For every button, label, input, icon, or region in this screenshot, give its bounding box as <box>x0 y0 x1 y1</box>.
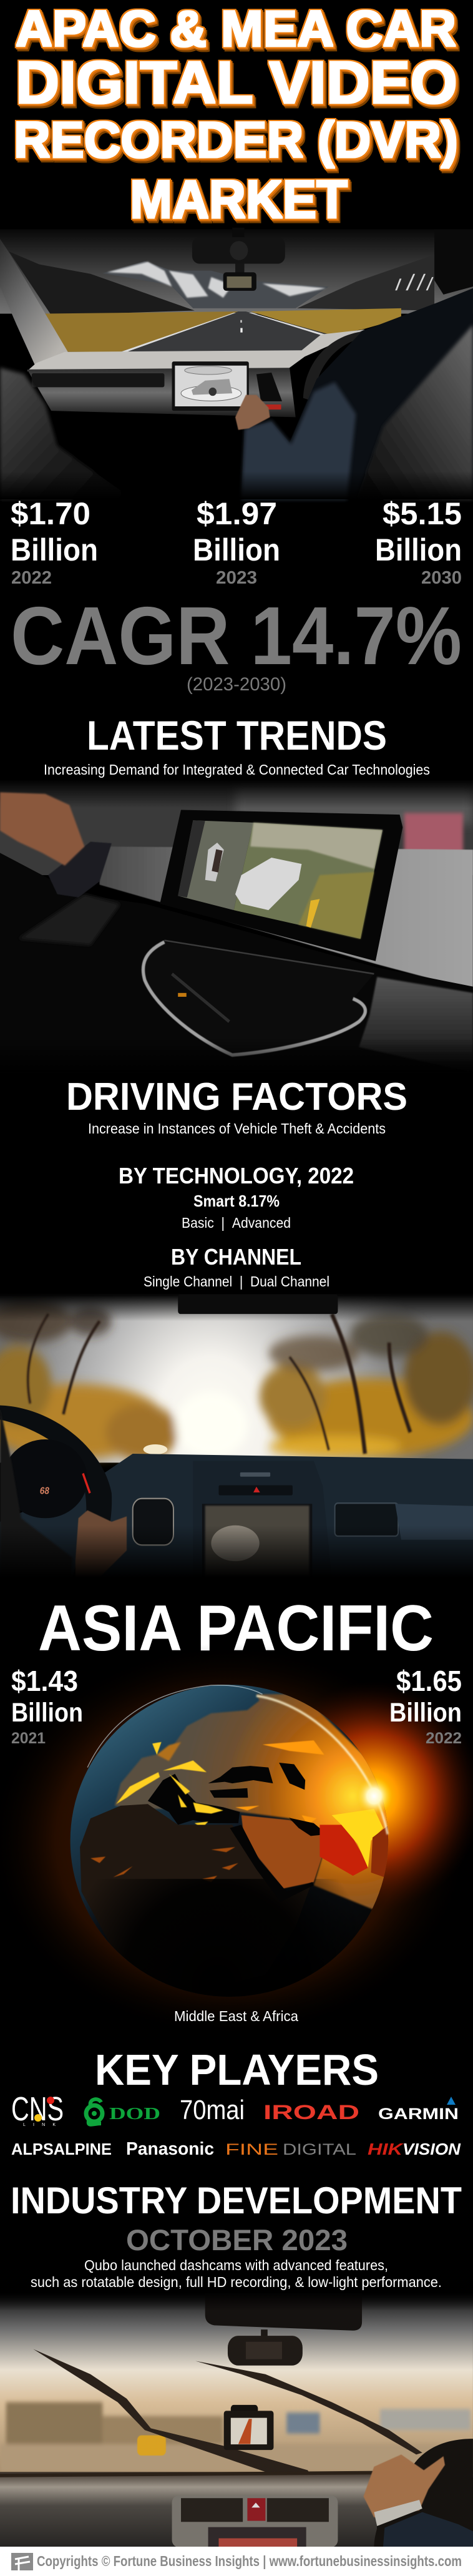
footer band <box>0 2547 473 2576</box>
stat: 2022 market value: $1.70 <box>11 496 90 531</box>
latest trends description: Increasing Demand for Integrated & Connected Car Technologies <box>44 762 430 778</box>
wipers <box>33 2349 422 2479</box>
tablet display <box>172 361 249 411</box>
segment: by channel: BY CHANNEL <box>171 1244 301 1270</box>
logo: Panasonic: Panasonic <box>126 2139 214 2159</box>
stat: 2030 market value: 2030 <box>421 568 462 588</box>
rear view mirror with dashcam <box>192 228 285 291</box>
stat: 2023 market value <box>193 496 280 588</box>
photo: autumn road through windshield <box>0 1295 473 1577</box>
dash trim and climate panel <box>143 941 374 1055</box>
date: october 2023: OCTOBER 2023 <box>126 2223 348 2256</box>
dashboard: 68 <box>40 1486 50 1497</box>
stat: 2022 market value: 2022 <box>11 568 52 588</box>
hazard and air vents <box>172 2495 338 2547</box>
globe illustration <box>20 1647 473 2012</box>
regional stat: 2022: Billion <box>389 1698 462 1728</box>
CAGR period: (2023-2030) <box>187 674 286 695</box>
industry development description <box>31 2257 442 2290</box>
africa <box>80 1804 310 1934</box>
industry development description: such as rotatable design, full HD recording, & low-light performance. <box>31 2274 442 2290</box>
logo: DOD <box>86 2099 160 2125</box>
yellow taxi <box>137 2436 166 2456</box>
photo: driver windshield and dashboard tablet <box>0 228 473 499</box>
logo: Hikvision: VISION <box>402 2140 461 2158</box>
stat: 2022 market value: Billion <box>11 532 98 567</box>
seats and driver <box>0 368 124 499</box>
title: APAC & MEA CAR <box>16 1 456 57</box>
regional stat: 2021: 2021 <box>11 1730 46 1747</box>
photo: rainy windshield with wipers and GPS <box>0 2292 473 2547</box>
heading: latest trends: LATEST TRENDS <box>87 712 387 758</box>
footer logo <box>11 2553 33 2570</box>
logo: Alps Alpine: ALPSALPINE <box>11 2140 112 2158</box>
mirror and dash camera <box>205 2301 362 2366</box>
title: DIGITAL VIDEO <box>16 49 457 116</box>
stat: 2023 market value: 2023 <box>216 568 257 588</box>
regional stat: 2022 <box>389 1665 462 1747</box>
title <box>14 1 458 230</box>
logo: CNS Link: CNS <box>11 2090 64 2128</box>
logo: Garmin <box>378 2097 459 2123</box>
logo: IROAD: IROAD <box>263 2101 359 2123</box>
dashboard <box>0 1405 473 1577</box>
driver hand and steering wheel <box>363 2439 473 2547</box>
segment: by technology: Basic | Advanced <box>182 1215 291 1231</box>
europe and mediterranean <box>116 1740 324 1828</box>
stat: 2023 market value: Billion <box>193 532 280 567</box>
title: MARKET <box>130 170 348 230</box>
logo: DOD: DOD <box>109 2104 160 2123</box>
title: RECORDER (DVR) <box>14 112 458 169</box>
arabia and red sea <box>241 1815 327 1889</box>
industry development description: Qubo launched dashcams with advanced features, <box>84 2257 388 2273</box>
regional stat: 2021 <box>11 1665 83 1747</box>
stat: 2022 market value <box>11 496 98 588</box>
screen bezel and camera view <box>160 810 402 961</box>
stat: 2030 market value: Billion <box>375 532 462 567</box>
logo: Hikvision: HIK <box>368 2140 404 2158</box>
logo: Hikvision <box>368 2140 461 2158</box>
india <box>319 1824 368 1876</box>
logo: Fine Digital <box>225 2141 356 2158</box>
top fade <box>0 2292 473 2311</box>
logo: Garmin: GARMIN <box>378 2105 459 2123</box>
segment: by technology: BY TECHNOLOGY, 2022 <box>119 1163 354 1188</box>
logo: Fine Digital: FINE <box>225 2141 278 2158</box>
photo: infotainment surround-view screen <box>0 780 473 1072</box>
segment: by technology <box>119 1163 354 1231</box>
stat: 2023 market value: $1.97 <box>197 496 277 531</box>
land: eurasia and asia <box>115 1694 392 1917</box>
segment: by channel: Single Channel | Dual Channel <box>144 1273 329 1290</box>
heading: driving factors: DRIVING FACTORS <box>66 1075 407 1119</box>
heading: asia pacific: ASIA PACIFIC <box>38 1592 434 1665</box>
logo: Fine Digital: DIGITAL <box>283 2141 356 2158</box>
logo: CNS Link: LINK <box>23 2123 56 2127</box>
GPS navigation unit <box>224 2405 273 2450</box>
regional stat: 2022: 2022 <box>426 1730 462 1747</box>
stat: 2030 market value: $5.15 <box>383 496 462 531</box>
segment: by technology: Smart 8.17% <box>193 1192 280 1210</box>
driving factors description: Increase in Instances of Vehicle Theft & Accidents <box>88 1120 386 1137</box>
stat: 2030 market value <box>375 496 462 588</box>
label: middle east and africa: Middle East & Africa <box>174 2008 298 2024</box>
regional stat: 2021: Billion <box>11 1698 83 1728</box>
heading: key players: KEY PLAYERS <box>95 2045 379 2094</box>
segment: by channel <box>144 1244 329 1290</box>
logo: 70mai: 70mai <box>180 2095 245 2125</box>
regional stat: 2022: $1.65 <box>396 1665 462 1697</box>
regional stat: 2021: $1.43 <box>11 1665 78 1697</box>
